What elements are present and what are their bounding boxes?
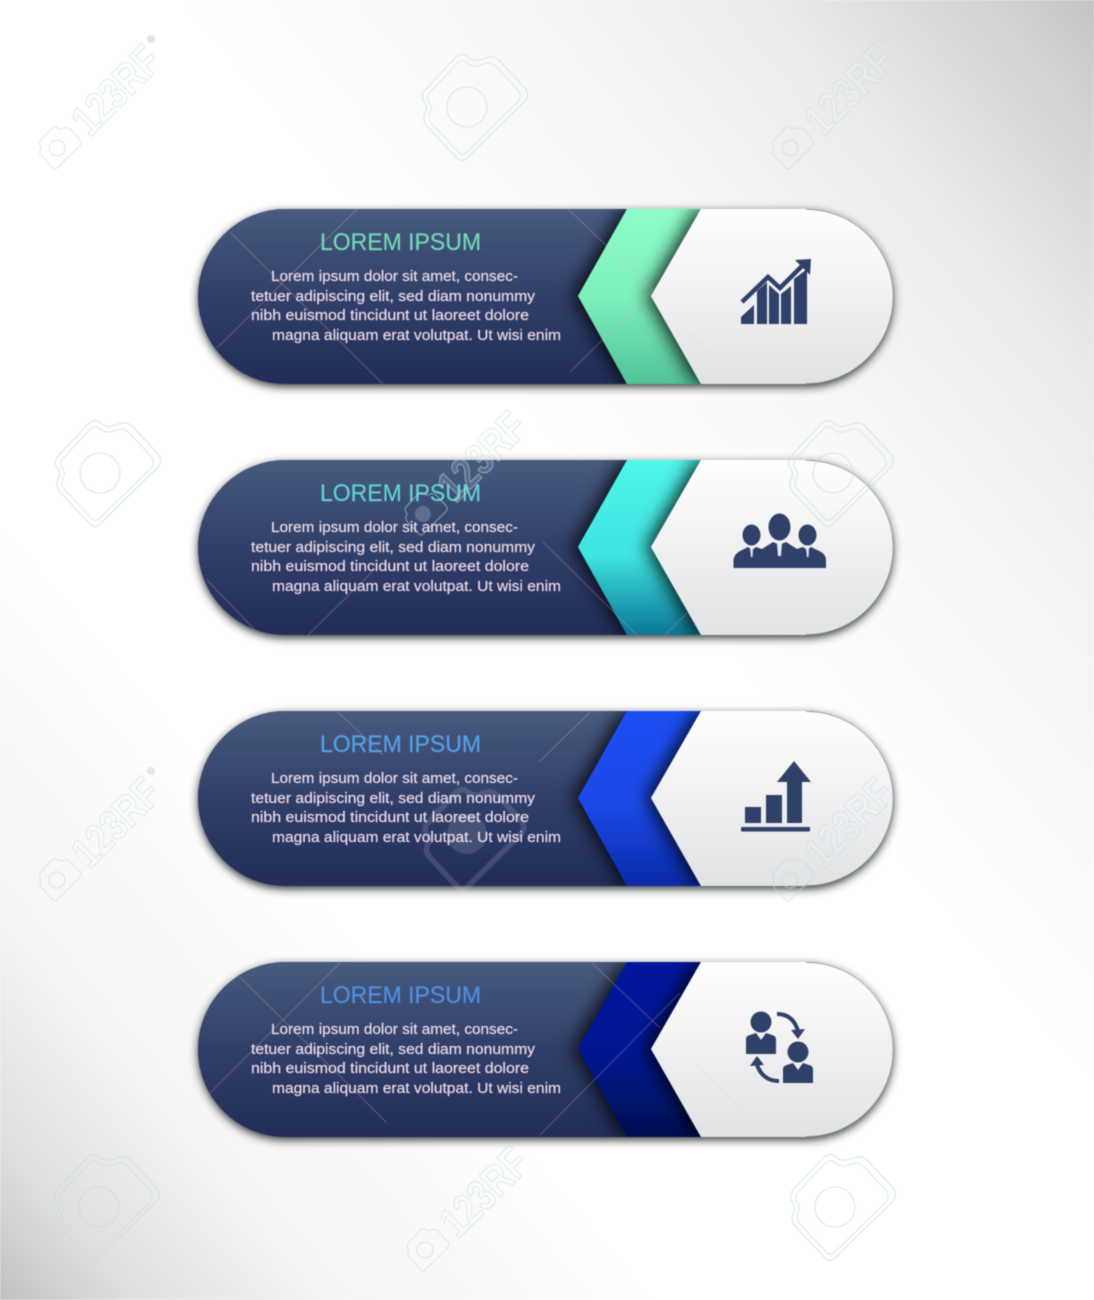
row 2 heading: LOREM IPSUM	[320, 480, 481, 507]
row 2 panel	[198, 460, 900, 638]
row 2 body text	[251, 519, 561, 595]
icon: people exchange cycle	[746, 1012, 813, 1083]
row 3 body text: magna aliquam erat volutpat. Ut wisi enim	[272, 829, 561, 846]
row 4 pill base	[198, 962, 893, 1137]
row 3 layered shapes	[198, 711, 900, 886]
row 3 heading: LOREM IPSUM	[320, 731, 481, 758]
row 4 body text: magna aliquam erat volutpat. Ut wisi enim	[272, 1080, 561, 1097]
watermark: logo right lower: 123RF	[795, 768, 904, 877]
watermark: stamp centre	[425, 790, 524, 889]
watermark: logo middle: 123RF	[428, 402, 537, 511]
row 2 pill base	[198, 460, 893, 635]
row 3 body text: nibh euismod tincidunt ut laoreet dolore	[251, 809, 529, 826]
row 1 layered shapes	[198, 209, 900, 384]
watermark: logo middle	[405, 402, 537, 535]
row 2 body text: Lorem ipsum dolor sit amet, consec-	[271, 519, 518, 536]
row 3 body text: Lorem ipsum dolor sit amet, consec-	[271, 770, 518, 787]
row 3 body text: tetuer adipiscing elit, sed diam nonummy	[251, 790, 536, 807]
watermark: logo right lower	[772, 768, 904, 901]
icon: business team	[734, 514, 826, 568]
row 4 body text	[251, 1021, 561, 1097]
row 1 panel	[198, 209, 900, 384]
row 4 body text: Lorem ipsum dolor sit amet, consec-	[271, 1021, 518, 1038]
row 3 body text	[251, 770, 561, 846]
watermark: logo top right: 123RF	[795, 36, 904, 145]
row 2 body text: tetuer adipiscing elit, sed diam nonummy	[251, 539, 536, 556]
row 1 pill base	[198, 209, 893, 384]
row 1 body text	[251, 268, 561, 344]
row 4 body text: tetuer adipiscing elit, sed diam nonummy	[251, 1041, 536, 1058]
row 3 pill base	[198, 711, 893, 886]
watermark: logo top right	[772, 35, 904, 169]
watermark: stamp right	[788, 420, 894, 526]
row 2 layered shapes	[198, 460, 900, 638]
row 1 body text: Lorem ipsum dolor sit amet, consec-	[271, 268, 518, 285]
watermark: logo left lower: 123RF	[62, 768, 171, 877]
watermark: logo bottom: 123RF	[430, 1138, 539, 1247]
watermark: stamp bottom left	[54, 1154, 159, 1260]
row 4 panel	[198, 962, 900, 1137]
row 2 body text: nibh euismod tincidunt ut laoreet dolore	[251, 558, 529, 575]
row 1 heading: LOREM IPSUM	[320, 229, 481, 256]
row 4 layered shapes	[198, 962, 900, 1137]
watermark: stamp left	[55, 420, 160, 526]
watermark: stamp bottom right	[790, 1154, 896, 1260]
watermark: logo top left: 123RF	[62, 36, 171, 145]
watermark: logo left lower	[39, 767, 171, 901]
row 3 panel	[198, 711, 900, 886]
row 4 body text: nibh euismod tincidunt ut laoreet dolore	[251, 1060, 529, 1077]
row 1 body text: magna aliquam erat volutpat. Ut wisi enim	[272, 327, 561, 344]
watermark: logo top left	[39, 35, 171, 169]
row 2 body text: magna aliquam erat volutpat. Ut wisi enim	[272, 578, 561, 595]
watermark: logo bottom	[407, 1138, 539, 1271]
icon: growth bars with up arrow	[741, 761, 811, 832]
row 1 body text: nibh euismod tincidunt ut laoreet dolore	[251, 307, 529, 324]
row 4 heading: LOREM IPSUM	[320, 982, 481, 1009]
icon: rising bar chart with arrow	[741, 259, 811, 324]
row 1 body text: tetuer adipiscing elit, sed diam nonummy	[251, 288, 536, 305]
watermark: stamp top	[422, 54, 528, 160]
